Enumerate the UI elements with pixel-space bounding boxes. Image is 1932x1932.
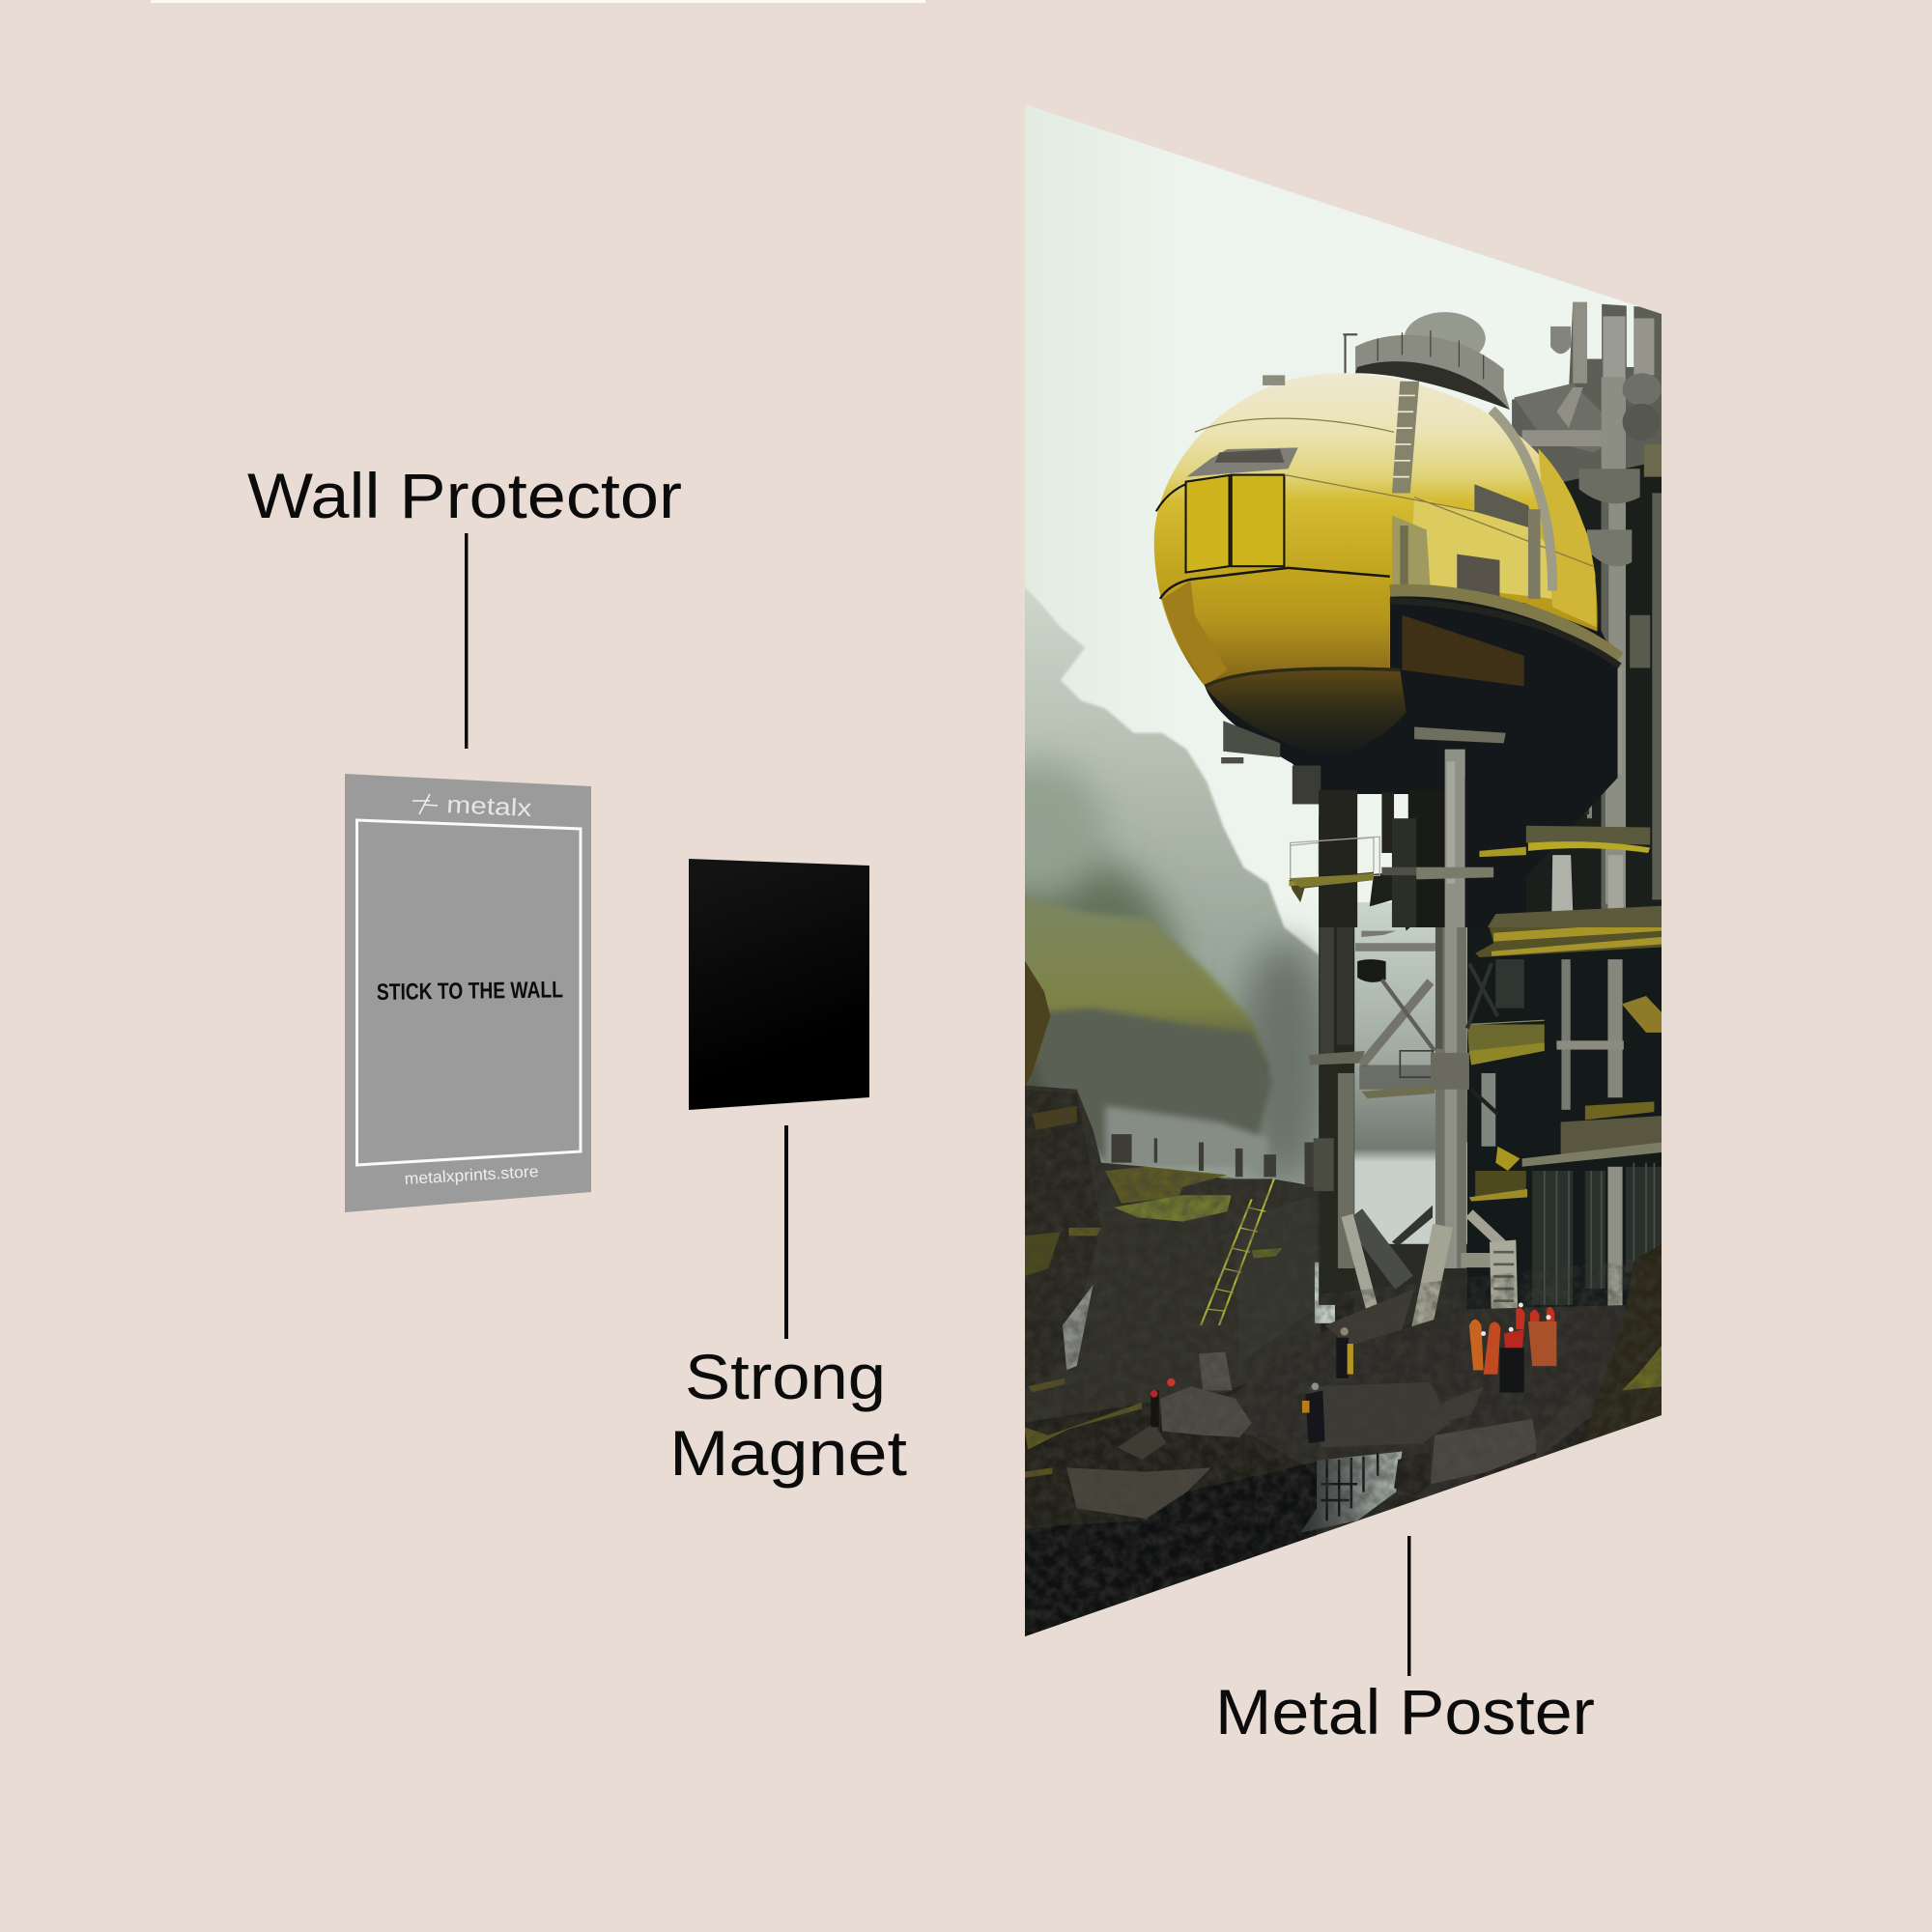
middle columns (1561, 959, 1571, 1110)
cross beams (1361, 981, 1431, 1065)
mid tower pieces (1223, 721, 1280, 757)
leader line: Metal Poster (1407, 1536, 1410, 1676)
right complex dark mass (1466, 927, 1662, 1310)
dark shelf (1025, 1403, 1303, 1468)
logo mark (412, 794, 438, 814)
figure kneeling (1302, 1382, 1324, 1443)
ladder (1201, 1179, 1274, 1325)
misty forest and valley (1025, 587, 1320, 1184)
ladder strip (1392, 382, 1419, 493)
figure with yellow vest (1336, 1327, 1353, 1378)
side hardware (1392, 516, 1431, 593)
inner white frame (357, 820, 581, 1165)
fence posts (1111, 1134, 1321, 1187)
plate body (345, 774, 591, 1212)
people on the ground (1151, 1302, 1556, 1443)
yellow deck (1475, 927, 1662, 957)
workers group (1469, 1302, 1556, 1393)
left moss streaks (1024, 1403, 1142, 1449)
top white strip (151, 0, 925, 3)
dark pool (1024, 1462, 1317, 1638)
under sphere shadow (1205, 575, 1618, 927)
bright water reflection (1300, 1452, 1402, 1533)
balcony (1390, 590, 1620, 658)
leader line: Wall Protector (465, 533, 468, 749)
center hardware (1370, 873, 1410, 931)
sphere body (1154, 373, 1598, 686)
yellow windows (1186, 475, 1284, 573)
plate url: metalxprints.store (404, 1162, 539, 1188)
sphere dark left shading (1162, 581, 1227, 686)
tower structure (1289, 817, 1662, 1327)
strong magnet plate (689, 859, 869, 1110)
hillside (1020, 895, 1272, 1167)
seams (1156, 484, 1400, 686)
figures at cliff (1151, 1378, 1176, 1427)
slabs (1160, 1386, 1252, 1437)
upper left platform (1291, 838, 1374, 878)
logo wordmark: metalx (446, 791, 532, 822)
left platform right (1467, 1024, 1545, 1055)
label: Metal Poster: Metal Poster (1215, 1676, 1595, 1747)
right boulder (1585, 1244, 1662, 1445)
sphere right pale panel (1410, 497, 1552, 599)
gaps between legs (1354, 902, 1467, 1244)
sphere tower upper section (1154, 298, 1662, 927)
roof gallery and dome (1405, 312, 1486, 365)
poster sky (1025, 104, 1639, 954)
plate instruction: STICK TO THE WALL (377, 977, 563, 1006)
cliff rocks and moss (1024, 959, 1662, 1642)
upper bright columns (1551, 854, 1573, 913)
infographic canvas (151, 0, 1662, 1735)
dark lower base (1024, 1289, 1662, 1642)
lower legs and pipes (1353, 1215, 1405, 1283)
diagonal cross right (1467, 963, 1497, 1029)
ground, rocks and water (1024, 1244, 1662, 1638)
leader line: Strong Magnet (784, 1125, 788, 1339)
label: Strong Magnet: Strong (685, 1341, 886, 1412)
metal poster (1025, 104, 1662, 1636)
lower deck (1561, 1116, 1662, 1154)
right industrial tower (1512, 302, 1662, 501)
wall protector plate (345, 774, 591, 1212)
label: Strong Magnet (669, 1341, 907, 1489)
label: Wall Protector: Wall Protector (247, 460, 682, 531)
left tower leg (1319, 817, 1354, 1305)
gravel ground (1227, 1305, 1626, 1500)
lower balconies (1291, 837, 1379, 879)
main leg (1435, 927, 1466, 1268)
label: Strong Magnet: Magnet (669, 1417, 907, 1489)
grey patch above window (1186, 447, 1298, 477)
rock texture (1025, 1082, 1662, 1642)
